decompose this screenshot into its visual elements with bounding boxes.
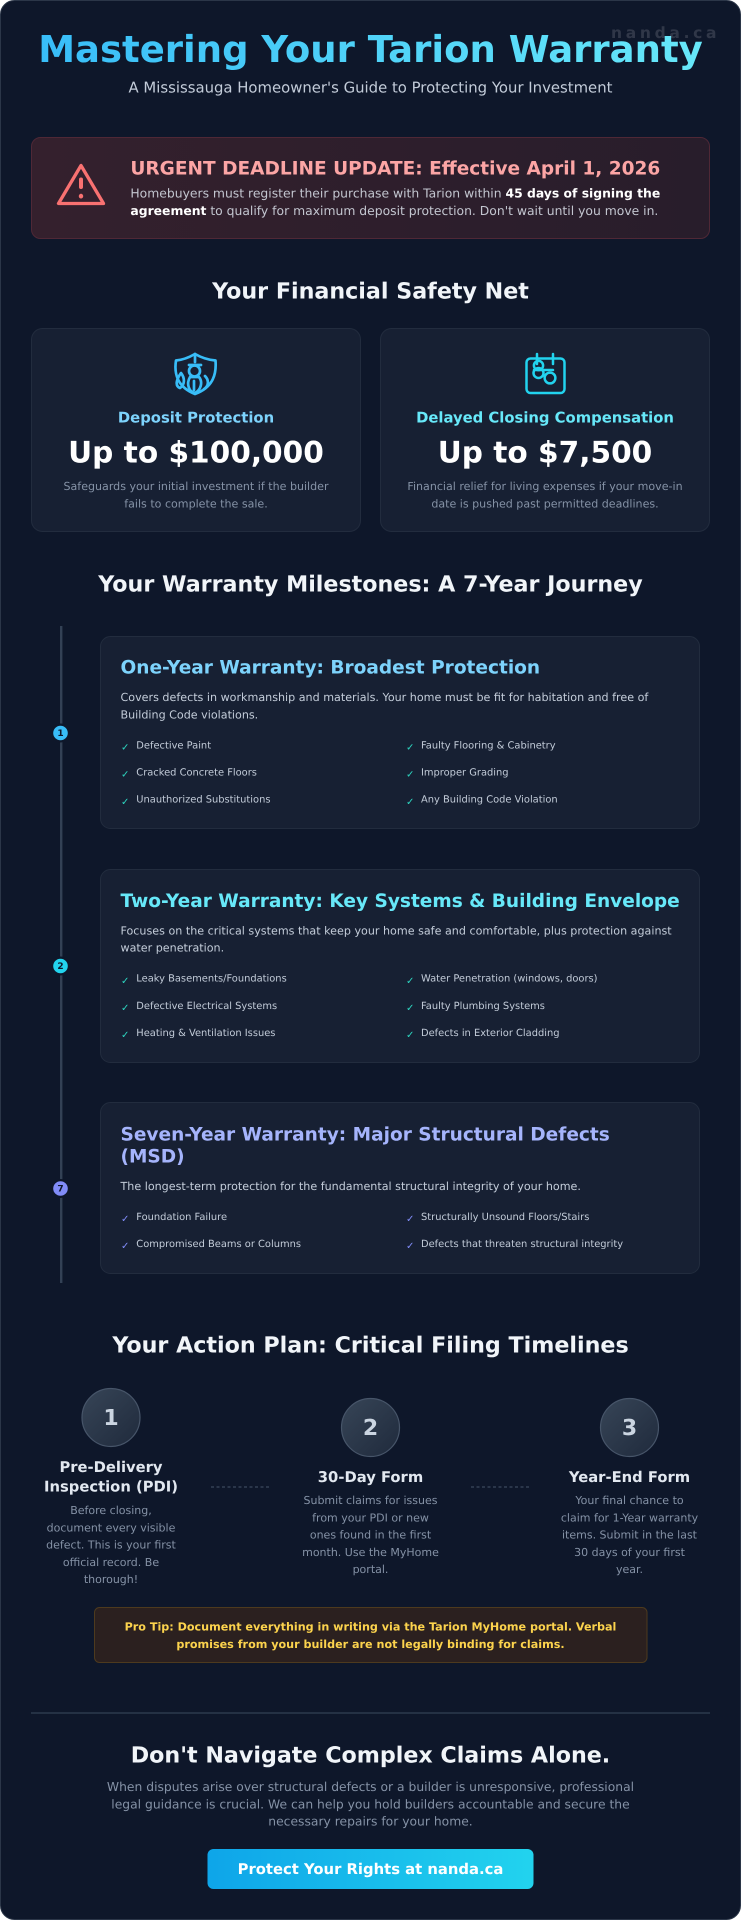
callout: pro tip	[94, 1608, 647, 1662]
callout: pro tip: Pro Tip: Document everything in writing via the Tarion MyHome portal. Verbal	[125, 1621, 616, 1634]
checklist: Defects that threaten structural integrity	[421, 1239, 623, 1250]
card title: One-Year Warranty: Broadest Protection	[120, 657, 540, 678]
header	[38, 28, 703, 97]
timeline	[51, 626, 70, 1283]
checklist: Leaky Basements/Foundations	[136, 974, 287, 985]
cta paragraph: necessary repairs for your home.	[268, 1815, 473, 1829]
checklist: ✓	[121, 976, 129, 987]
cta button: Protect Your Rights at nanda.ca	[238, 1861, 503, 1878]
step description: thorough!	[84, 1573, 138, 1586]
checklist: Defective Paint	[136, 740, 211, 751]
card description: The longest-term protection for the fundamental structural integrity of your home.	[120, 1180, 581, 1193]
step description: portal.	[353, 1563, 388, 1576]
step title: Year-End Form	[568, 1469, 690, 1486]
panel: delayed closing compensation	[380, 328, 710, 532]
checklist: ✓	[121, 1003, 129, 1014]
checklist: ✓	[121, 1214, 129, 1225]
checklist: Unauthorized Substitutions	[136, 795, 270, 806]
step 1: pre-delivery inspection	[44, 1388, 178, 1586]
checklist	[121, 974, 598, 1041]
alert body text	[130, 187, 660, 218]
card description: Safeguards your initial investment if the builder	[64, 480, 329, 493]
step description: claim for 1-Year warranty	[561, 1511, 699, 1524]
step description: year.	[616, 1563, 643, 1576]
cta paragraph: legal guidance is crucial. We can help you hold builders accountable and secure the	[111, 1797, 630, 1811]
card description: Building Code violations.	[120, 708, 258, 721]
cta button	[208, 1849, 534, 1889]
timeline dot 7	[51, 1179, 70, 1198]
card description: date is pushed past permitted deadlines.	[431, 497, 659, 510]
checklist	[121, 1212, 623, 1252]
card description: Financial relief for living expenses if your move-in	[407, 480, 683, 493]
connector	[211, 1486, 270, 1488]
checklist: ✓	[121, 1030, 129, 1041]
call to action	[107, 1743, 634, 1889]
step description: document every visible	[47, 1521, 176, 1534]
step title: 30-Day Form	[318, 1469, 423, 1486]
watermark: nanda.ca	[611, 24, 720, 42]
step title	[44, 1459, 178, 1496]
card amount: Up to $7,500	[438, 436, 652, 470]
card description: water penetration.	[120, 942, 224, 955]
checklist: ✓	[406, 797, 414, 808]
timeline dot 1	[51, 724, 70, 742]
checklist: ✓	[121, 770, 129, 781]
alert body text: agreement to qualify for maximum deposit protection. Don't wait until you move in.	[130, 204, 658, 218]
step number: 2	[363, 1416, 378, 1441]
card title: (MSD)	[120, 1147, 185, 1168]
checklist: ✓	[406, 1214, 414, 1225]
checklist: ✓	[406, 1003, 414, 1014]
step description	[302, 1494, 439, 1576]
checklist: ✓	[121, 742, 129, 754]
checklist: Water Penetration (windows, doors)	[421, 974, 598, 985]
card label: Delayed Closing Compensation	[416, 410, 674, 427]
checklist	[121, 740, 558, 808]
checklist: Faulty Flooring & Cabinetry	[421, 740, 556, 751]
card title: Two-Year Warranty: Key Systems & Building Envelope	[120, 891, 680, 912]
checklist: Cracked Concrete Floors	[136, 768, 257, 778]
step description: month. Use the MyHome	[302, 1546, 439, 1559]
card description	[64, 480, 329, 510]
cta paragraph	[107, 1780, 634, 1829]
step description: Submit claims for issues	[304, 1494, 438, 1507]
panel: deposit protection	[32, 328, 360, 532]
step number: 1	[103, 1406, 119, 1431]
step number: 3	[622, 1416, 637, 1441]
icon: calendar with coins	[526, 354, 564, 393]
cta paragraph: When disputes arise over structural defects or a builder is unresponsive, professional	[107, 1780, 634, 1794]
step number circle	[82, 1388, 140, 1446]
checklist: ✓	[406, 976, 414, 987]
card description	[120, 691, 649, 721]
checklist: ✓	[406, 1030, 414, 1041]
alert heading: URGENT DEADLINE UPDATE: Effective April 1, 2026	[130, 158, 660, 179]
card description: fails to complete the sale.	[124, 497, 268, 510]
alert body text: Homebuyers must register their purchase with Tarion within 45 days of signing the	[130, 187, 660, 201]
icon: warning triangle	[58, 166, 104, 204]
step description: 30 days of your first	[574, 1546, 686, 1559]
card amount: Up to $100,000	[68, 436, 324, 470]
step description	[46, 1504, 177, 1586]
card description	[120, 924, 672, 955]
step description: official record. Be	[63, 1556, 159, 1569]
cta heading: Don't Navigate Complex Claims Alone.	[131, 1743, 610, 1769]
card description: Focuses on the critical systems that keep your home safe and comfortable, plus protection against	[120, 924, 672, 937]
checklist: Foundation Failure	[136, 1212, 227, 1223]
timeline dot 7: 7	[57, 1185, 64, 1195]
step description: Your final chance to	[574, 1494, 684, 1507]
step 3: year-end form	[561, 1398, 699, 1576]
heading: action plan: Your Action Plan: Critical Filing Timelines	[111, 1333, 629, 1359]
title: Mastering Your Tarion Warranty	[38, 28, 703, 71]
card title	[120, 1124, 610, 1168]
step description	[561, 1494, 699, 1576]
checklist: Defects in Exterior Cladding	[421, 1028, 560, 1039]
card label: Deposit Protection	[118, 410, 274, 427]
panel: seven-year warranty	[100, 1102, 700, 1274]
checklist: Improper Grading	[421, 768, 509, 778]
timeline dot 2	[51, 956, 70, 976]
checklist: Defective Electrical Systems	[136, 1001, 277, 1012]
step 2: 30-day form	[302, 1398, 439, 1576]
checklist: Compromised Beams or Columns	[136, 1239, 301, 1250]
card description: Covers defects in workmanship and materials. Your home must be fit for habitation and free of	[120, 691, 649, 704]
step number circle	[600, 1398, 658, 1456]
step number circle	[342, 1398, 400, 1456]
step description: items. Submit in the last	[562, 1529, 698, 1542]
step description: ones found in the first	[310, 1529, 432, 1542]
checklist: ✓	[406, 770, 414, 781]
subtitle: A Mississauga Homeowner's Guide to Protecting Your Investment	[129, 79, 613, 97]
heading: financial safety net: Your Financial Safety Net	[211, 278, 529, 304]
checklist: Any Building Code Violation	[421, 795, 558, 806]
step title: Inspection (PDI)	[44, 1479, 178, 1496]
checklist: Faulty Plumbing Systems	[421, 1001, 545, 1012]
step title: Pre-Delivery	[59, 1459, 163, 1476]
timeline dot 1: 1	[57, 729, 64, 739]
checklist: ✓	[406, 1241, 414, 1252]
icon: shield with key	[175, 354, 216, 394]
card title: Seven-Year Warranty: Major Structural Defects	[120, 1124, 610, 1145]
checklist: Structurally Unsound Floors/Stairs	[421, 1212, 589, 1223]
callout: pro tip: promises from your builder are not legally binding for claims.	[176, 1638, 565, 1651]
step description: from your PDI or new	[312, 1511, 429, 1524]
checklist: Heating & Ventilation Issues	[136, 1028, 275, 1039]
panel: two-year warranty	[100, 870, 700, 1062]
checklist: ✓	[121, 1241, 129, 1252]
panel: urgent deadline alert	[32, 138, 710, 238]
checklist: ✓	[406, 742, 414, 754]
step description: Before closing,	[70, 1504, 152, 1517]
timeline dot 2: 2	[57, 962, 64, 972]
panel: one-year warranty	[100, 636, 700, 828]
card description	[407, 480, 683, 510]
checklist: ✓	[121, 797, 129, 808]
step description: defect. This is your first	[46, 1539, 177, 1552]
heading: warranty milestones: Your Warranty Milestones: A 7-Year Journey	[97, 572, 643, 598]
connector	[471, 1486, 530, 1488]
